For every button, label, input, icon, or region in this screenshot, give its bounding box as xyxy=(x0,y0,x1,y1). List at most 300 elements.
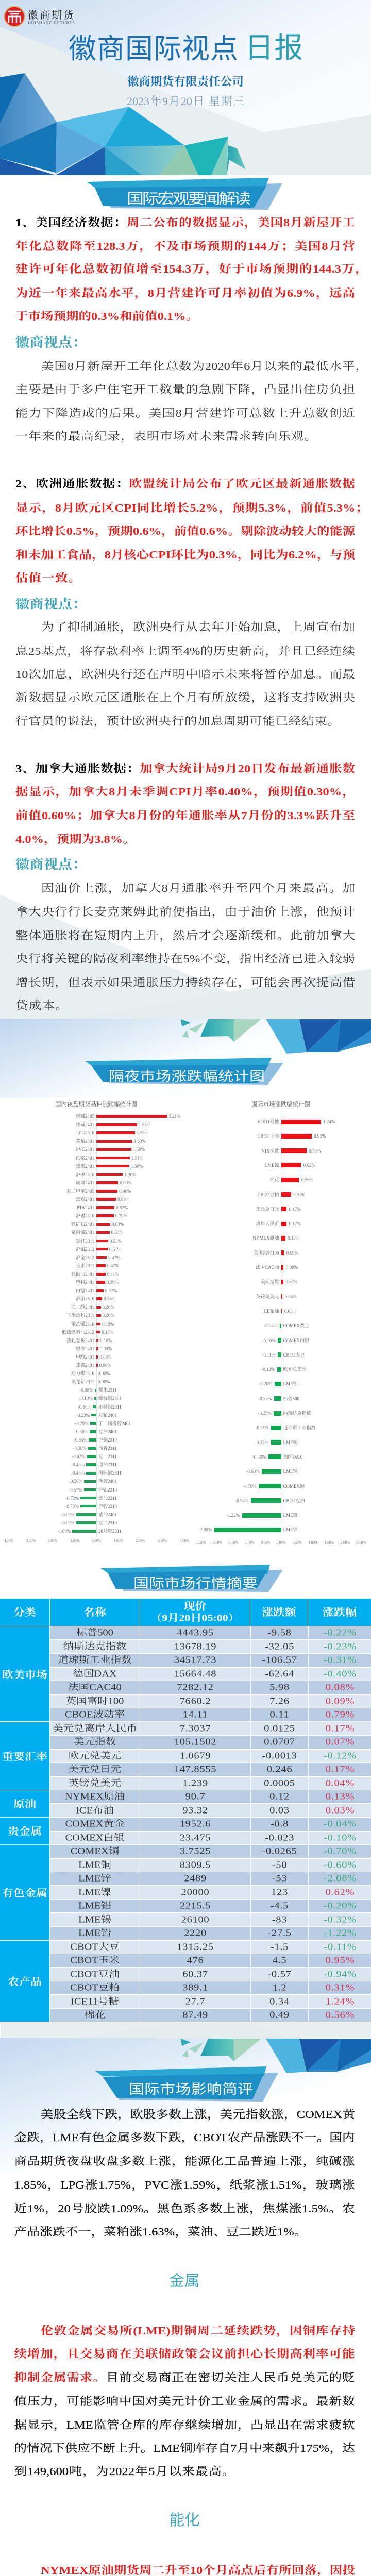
news 3: Canada inflation: 前值0.60%；加拿大8月份的年通胀率从7月份的3.3%跃升至 xyxy=(15,810,355,822)
bar chart: domestic night session: 不锈钢2311 xyxy=(98,1404,122,1410)
bar chart: international markets: 1.24% xyxy=(323,1119,335,1124)
table rows: 棉花 xyxy=(85,2010,105,2020)
table rows: ICE布油 xyxy=(76,1805,114,1815)
bar chart: domestic night session: -0.35% xyxy=(74,1437,87,1443)
bar chart: domestic night session: 0.42% xyxy=(107,1263,119,1268)
table rows: 0.13% xyxy=(326,1791,355,1802)
view 3 text: 央行将关键的隔夜利率维持在5%不变，指出经济已进入较弱 xyxy=(15,953,355,965)
table rows: 法国CAC40 xyxy=(68,1682,122,1692)
table rows: 0.08% xyxy=(326,1682,355,1692)
bar chart: domestic night session: 棕榈油2401 xyxy=(71,1272,94,1277)
bar chart: domestic night session: 焦煤2401 xyxy=(76,1164,94,1169)
bar chart: domestic night session xyxy=(3,1101,189,1543)
table header: 名称 xyxy=(83,1607,106,1618)
news 2: Europe inflation xyxy=(15,478,368,584)
bar chart: domestic night session: -1.00% xyxy=(69,1539,79,1543)
section banner: market summary xyxy=(100,1565,283,1592)
table rows: NYMEX原油 xyxy=(65,1791,125,1802)
bar chart: international markets: -2.08% xyxy=(198,1527,212,1532)
table rows: -62.64 xyxy=(265,1669,294,1679)
bar chart: international markets: -0.50% xyxy=(260,1540,271,1545)
news 3: Canada inflation: 3、加拿大通胀数据：加拿大统计局9月20日发布最新通胀数 xyxy=(15,763,355,775)
table rows: 2489 xyxy=(184,1873,207,1884)
bar chart: domestic night session: 氧化铝2311 xyxy=(71,1379,94,1384)
table rows: 0.56% xyxy=(326,2010,355,2020)
table rows: 60.37 xyxy=(182,1969,208,1979)
table rows: 0.0125 xyxy=(264,1723,295,1733)
overnight section background xyxy=(0,1019,371,1098)
heading: metals: 金属 xyxy=(169,2273,200,2290)
icon: Huishang Futures logo xyxy=(4,6,75,27)
date: 2023年9月20日 星期三 xyxy=(127,95,244,108)
table rows: 0.95% xyxy=(326,1955,355,1965)
company name: 徽商期货有限责任公司 xyxy=(127,75,244,88)
section 1 footer band xyxy=(0,895,371,1019)
bar chart: domestic night session: 0.17% xyxy=(102,1330,114,1335)
table rows: 7282.12 xyxy=(177,1682,214,1692)
heading: Huishang view 1: 徽商视点： xyxy=(15,335,87,349)
bar chart: domestic night session: 0.96% xyxy=(119,1189,131,1194)
table rows: -4.5 xyxy=(271,1901,289,1911)
bar chart: international markets: 0.07% xyxy=(285,1279,298,1284)
news 3: Canada inflation: 4.0%，预期为3.8%。 xyxy=(15,834,136,845)
table rows: -2.08% xyxy=(324,1873,357,1884)
bar chart: domestic night session: 玉米淀粉2311 xyxy=(66,1313,94,1318)
bar chart: international markets: CBOT玉米 xyxy=(257,1133,279,1139)
bar chart: international markets: -1.00% xyxy=(244,1540,255,1545)
table rows: 87.49 xyxy=(182,2010,208,2020)
bar chart: domestic night session: 甲醇2401 xyxy=(76,1354,94,1360)
heading: Huishang view 2: 徽商视点： xyxy=(15,597,87,611)
table rows: CBOE波动率 xyxy=(65,1709,125,1720)
bar chart: domestic night session: 3.21% xyxy=(168,1114,181,1119)
bar chart: international markets: 0.50% xyxy=(293,1540,302,1545)
bar chart: international markets: 1.50% xyxy=(325,1540,334,1545)
table rows: -0.32% xyxy=(324,1914,357,1924)
bar chart: international markets: -0.11% xyxy=(262,1352,275,1358)
commentary: metals: 的情况下供应不断上升。LME铜库存自7月中来飙升175%，达 xyxy=(14,2443,355,2454)
category: non-ferrous metals: 有色金属 xyxy=(2,1887,47,1899)
bar chart: international markets: 0.62% xyxy=(303,1163,315,1168)
bar chart: domestic night session: -0.46% xyxy=(71,1470,85,1476)
table rows: 0.04% xyxy=(326,1778,355,1788)
bar chart: domestic night session: 20号胶2311 xyxy=(98,1529,122,1534)
bar chart: international markets: -1.22% xyxy=(226,1513,240,1518)
bar chart: domestic night session: 3.00% xyxy=(158,1539,167,1543)
bar chart: domestic night session: 0.19% xyxy=(102,1321,114,1326)
bar chart: domestic night session: 热轧卷板2401 xyxy=(66,1338,94,1343)
bar chart: domestic night session: 1.63% xyxy=(134,1139,146,1144)
commentary: metals: 据显示，LME监管仓库的库存继续增加，凸显出在需求疲软 xyxy=(14,2419,355,2431)
chart title: 国际市场涨跌幅统计图 xyxy=(251,1101,310,1108)
bar chart: domestic night session: -4.00% xyxy=(3,1539,13,1543)
category: crude oil xyxy=(0,1790,49,1817)
bar chart: domestic night session: 纸浆2401 xyxy=(76,1155,94,1160)
table rows: 0.246 xyxy=(267,1764,292,1774)
bar chart: international markets: -2.00% xyxy=(212,1540,222,1545)
table rows: 0.34 xyxy=(269,1996,290,2006)
news 1: US economic data: 于市场预期的0.3%和前值0.1%。 xyxy=(15,311,198,323)
table rows: LME镍 xyxy=(78,1887,111,1897)
table rows: 93.32 xyxy=(182,1805,208,1815)
heading: energy and chemicals: 能化 xyxy=(169,2512,200,2529)
table rows: 德国DAX xyxy=(73,1669,117,1679)
table rows: 4.5 xyxy=(273,1955,286,1965)
bar chart: domestic night session: 0.63% xyxy=(112,1222,124,1227)
table header: （9月20日05:00） xyxy=(150,1612,240,1623)
table rows: CBOT豆粕 xyxy=(70,1982,120,1993)
section banner: overnight statistics: 隔夜市场涨跌幅统计图 xyxy=(109,1069,265,1084)
bar chart: domestic night session: -0.10% xyxy=(79,1396,93,1401)
commentary: metals: 抑制金属需求。目前交易商正在密切关注人民币兑美元的贬 xyxy=(14,2372,355,2384)
table rows: -0.31% xyxy=(324,1655,357,1665)
table rows: -0.0013 xyxy=(262,1751,297,1760)
bar chart: domestic night session: -0.56% xyxy=(69,1479,82,1484)
bar chart: international markets xyxy=(196,1101,366,1545)
table rows: -83 xyxy=(272,1914,287,1924)
table rows: 美元兑日元 xyxy=(69,1764,121,1774)
bar chart: domestic night session: -3.00% xyxy=(25,1539,36,1543)
bar chart: domestic night session: -0.08% xyxy=(79,1387,93,1393)
bar chart: domestic night session: 0.00% xyxy=(98,1379,110,1384)
bar chart: domestic night session: 0.10% xyxy=(100,1338,112,1343)
bar chart: international markets: 0.79% xyxy=(309,1148,321,1154)
bar chart: international markets: -0.40% xyxy=(252,1454,266,1460)
bar chart: international markets: -1.50% xyxy=(228,1540,238,1545)
title: 徽商国际视点 xyxy=(69,33,239,64)
commentary: market overview xyxy=(14,2108,355,2238)
table rows: -0.20% xyxy=(324,1901,357,1911)
bar chart: international markets: -0.31% xyxy=(255,1425,269,1430)
table rows: 美元指数 xyxy=(74,1737,116,1747)
category: non-ferrous metals xyxy=(0,1845,49,1940)
title xyxy=(69,31,303,64)
bar chart: international markets: 0.04% xyxy=(284,1294,297,1299)
table rows: -0.0265 xyxy=(262,1846,297,1856)
commentary: market overview: 美股全线下跌，欧股多数上涨，美元指数涨，COMEX黄 xyxy=(41,2109,355,2121)
icon: Huishang Futures logo: 徽商期货 xyxy=(28,9,75,21)
news 2: Europe inflation: 显示，8月欧元区CPI同比增长5.2%，预期5.3%，前值5.3%； xyxy=(15,502,368,514)
bar chart: international markets: 0.03% xyxy=(284,1309,296,1314)
bar chart: domestic night session: 螺纹钢2401 xyxy=(98,1396,122,1401)
view 2 text: 息25基点，将存款利率上调至4%的历史新高，并且已经连续 xyxy=(15,646,355,657)
table rows: LME铅 xyxy=(78,1928,111,1938)
table rows: 4443.95 xyxy=(177,1628,214,1638)
table rows: 纳斯达克指数 xyxy=(63,1641,127,1651)
bar chart: international markets: -0.20% xyxy=(259,1381,273,1386)
bar chart: domestic night session: -0.92% xyxy=(61,1512,75,1517)
bar chart: international markets: 法国CAC40 xyxy=(256,1265,279,1270)
table rows: 0.12 xyxy=(269,1791,290,1802)
category: Europe and US markets xyxy=(0,1626,49,1721)
bar chart: domestic night session: 沪铜2310 xyxy=(98,1437,117,1443)
bar chart: domestic night session: -0.23% xyxy=(76,1413,90,1418)
news 1: US economic data xyxy=(15,216,368,323)
category: precious metals xyxy=(0,1818,49,1844)
bar chart: international markets: LME锡 xyxy=(283,1440,298,1445)
table rows: 0.09% xyxy=(326,1696,355,1706)
bar chart: domestic night session: 纯碱2401 xyxy=(76,1122,94,1127)
bar chart: domestic night session: -1.09% xyxy=(57,1529,71,1534)
table rows: CBOT玉米 xyxy=(70,1955,120,1965)
view 1 text: 一年来的最高纪录，表明市场对未来需求转向乐观。 xyxy=(15,431,317,443)
commentary: metals: 值压力，可能影响中国对美元计价工业金属的需求。最新数 xyxy=(14,2396,355,2408)
bar chart: domestic night session: 0.32% xyxy=(105,1288,117,1293)
bar chart: domestic night session: 0.00% xyxy=(92,1539,101,1543)
bar chart: international markets: 英国富时100 xyxy=(254,1250,279,1256)
bar chart: international markets: 离岸人民币 xyxy=(256,1221,279,1226)
bar chart: international markets: 美元指数 xyxy=(260,1279,279,1284)
bar chart: domestic night session: 0.06% xyxy=(99,1363,111,1368)
bar chart: domestic night session: 聚丙烯2401 xyxy=(71,1230,94,1235)
bar chart: international markets: 2.50% xyxy=(357,1540,366,1545)
bar chart: international markets: NYMEX原油 xyxy=(252,1235,279,1241)
news 1: US economic data: 年化总数降至128.3万，不及市场预期的144万；美国8月营 xyxy=(15,241,355,252)
bar chart: domestic night session: 玻璃2401 xyxy=(76,1180,94,1185)
bar chart: domestic night session: 豆粕2401 xyxy=(98,1413,117,1418)
bar chart: domestic night session: 1.20% xyxy=(124,1172,137,1177)
bar chart: domestic night session: 豆油2401 xyxy=(98,1429,117,1434)
table rows: 0.79% xyxy=(326,1709,355,1720)
bar chart: domestic night session: 玉米2311 xyxy=(76,1263,94,1268)
bar chart: domestic night session: -0.38% xyxy=(73,1446,87,1451)
bar chart: international markets: LME铜 xyxy=(283,1469,298,1474)
bar chart: domestic night session: 0.89% xyxy=(117,1197,129,1202)
table rows: -0.60% xyxy=(324,1860,357,1870)
bar chart: domestic night session: 0.09% xyxy=(100,1346,112,1351)
table rows: 0.49 xyxy=(269,2010,290,2020)
table rows: 英镑兑美元 xyxy=(69,1778,121,1788)
table rows: COMEX铜 xyxy=(71,1846,119,1856)
heading: Huishang view 3: 徽商视点： xyxy=(15,857,87,872)
bar chart: domestic night session: -0.16% xyxy=(78,1404,91,1410)
table rows: 1.2 xyxy=(273,1982,286,1993)
table rows: -0.23% xyxy=(324,1641,357,1651)
news 3: Canada inflation xyxy=(15,762,355,845)
bar chart: international markets: VIX指数 xyxy=(262,1148,279,1154)
table rows: 8309.5 xyxy=(180,1860,211,1870)
bar chart: domestic night session: 沥青2311 xyxy=(98,1446,117,1451)
table rows: -0.12% xyxy=(324,1751,357,1760)
table rows: -27.5 xyxy=(267,1928,292,1938)
table rows: -0.8 xyxy=(271,1819,289,1829)
bar chart: international markets: 道琼斯工业指数 xyxy=(283,1425,316,1430)
view 2 text: 为了抑制通胀，欧洲央行从去年开始加息，上周宣布加 xyxy=(41,621,355,633)
bar chart: international markets: 0.13% xyxy=(288,1235,299,1241)
bar chart: international markets: LME锌 xyxy=(283,1527,298,1532)
section banner: market summary: 国际市场行情摘要 xyxy=(133,1575,258,1591)
commentary: market overview: 近1%，20号胶跌1.09%。黑色系多数上涨，焦煤涨1.5%。农 xyxy=(14,2203,355,2215)
bar chart: domestic night session: -0.73% xyxy=(65,1504,79,1509)
commentary: metals: 到149,600吨，为2022年5月以来最高。 xyxy=(14,2466,235,2478)
category: precious metals: 贵金属 xyxy=(8,1826,42,1837)
table rows: -0.11% xyxy=(324,1942,357,1952)
news 3: Canada inflation: 据显示，加拿大8月未季调CPI月率0.40%，预期值0.30%， xyxy=(15,786,355,798)
bar chart: international markets: -0.32% xyxy=(255,1440,268,1445)
bar chart: international markets: -0.04% xyxy=(264,1323,278,1328)
bar chart: domestic night session: 0.08% xyxy=(99,1354,112,1360)
bar chart: domestic night session: 0.82% xyxy=(116,1205,128,1210)
news 2: Europe inflation: 估值一致。 xyxy=(15,572,81,584)
view 3 text: 增长期，但表示如果通胀压力持续存在，可能会再次提高借 xyxy=(15,977,355,989)
section banner: macro news: 国际宏观要闻解读 xyxy=(127,191,251,207)
table rows: -1.5 xyxy=(271,1942,289,1952)
table rows: LME锡 xyxy=(78,1914,111,1924)
view 3 text: 拿大央行行长麦克莱姆此前便指出，由于油价上涨，他预计 xyxy=(15,906,355,918)
bar chart: international markets: -2.50% xyxy=(196,1540,206,1545)
bar chart: international markets: LME镍 xyxy=(265,1163,279,1168)
view 1 text: 主要是由于多户住宅开工数量的急剧下降，凸显出住房负担 xyxy=(15,384,355,396)
bar chart: domestic night session: 0.79% xyxy=(115,1213,127,1218)
bar chart: international markets: -0.12% xyxy=(261,1367,275,1372)
bar chart: international markets: -0.60% xyxy=(246,1469,260,1474)
bar chart: domestic night session: 0.47% xyxy=(108,1255,120,1260)
bar chart: domestic night session: LPG2310 xyxy=(76,1130,94,1136)
bar chart: international markets: COMEX黄金 xyxy=(283,1323,309,1328)
category: crude oil: 原油 xyxy=(13,1799,36,1809)
bar chart: international markets: 0.17% xyxy=(289,1221,301,1226)
table rows: -50 xyxy=(272,1860,287,1870)
bar chart: domestic night session: 燃油2311 xyxy=(98,1496,117,1501)
bar chart: domestic night session: 苯乙烯2310 xyxy=(71,1321,94,1326)
bar chart: domestic night session: 国际铜2311 xyxy=(98,1470,122,1476)
commentary: metals: 伦敦金属交易所(LME)期铜周二延续跌势，因铜库存持 xyxy=(41,2325,355,2337)
category: agricultural products: 农产品 xyxy=(8,1976,42,1987)
bar chart: domestic night session: 焦炭2401 xyxy=(76,1197,94,1202)
table rows: ICE11号糖 xyxy=(71,1996,119,2006)
bar chart: international markets: ICE布油 xyxy=(262,1309,279,1314)
table rows: -106.57 xyxy=(262,1655,297,1665)
bar chart: domestic night session: 0.41% xyxy=(107,1272,119,1277)
bar chart: international markets: 0.56% xyxy=(301,1177,313,1182)
bar chart: domestic night session: 4.00% xyxy=(180,1539,189,1543)
bar chart: domestic night session: 豆一2311 xyxy=(98,1454,117,1459)
bar chart: international markets: ICE11号糖 xyxy=(258,1119,279,1124)
table rows: 5.98 xyxy=(269,1682,290,1692)
table rows xyxy=(50,1626,371,2022)
section banner: market commentary: 国际市场影响简评 xyxy=(129,2081,253,2097)
bar chart: domestic night session: 0.20% xyxy=(103,1313,114,1318)
category: Europe and US markets: 欧美市场 xyxy=(2,1669,47,1680)
table rows: 123 xyxy=(271,1887,288,1897)
bar chart: domestic night session: 0.53% xyxy=(110,1239,122,1244)
bar chart: international markets: 棉花 xyxy=(269,1177,279,1182)
bar chart: domestic night session: 1.85% xyxy=(139,1122,150,1127)
bar chart: domestic night session: 1.50% xyxy=(131,1164,143,1169)
bar chart: domestic night session: PTA2401 xyxy=(77,1205,94,1210)
bar chart: domestic night session: 铁矿石2401 xyxy=(71,1222,94,1227)
table rows: 0.17% xyxy=(326,1764,355,1774)
table header: 涨跌额 xyxy=(262,1607,296,1618)
bar chart: domestic night session: 原油2311 xyxy=(98,1462,117,1467)
bar chart: domestic night session: -0.92% xyxy=(61,1520,75,1526)
table rows: 7660.2 xyxy=(180,1696,211,1706)
table rows: 20000 xyxy=(181,1887,209,1897)
commentary: market overview: 1.85%，LPG涨1.75%，PVC涨1.59%，纸浆涨1.51%，玻璃涨 xyxy=(14,2179,355,2191)
commentary: market overview: 产品涨跌不一，菜粕涨1.63%，菜油、豆二跌近1%。 xyxy=(14,2226,307,2238)
bar chart: domestic night session: 1.00% xyxy=(114,1539,123,1543)
table rows: -53 xyxy=(272,1873,287,1884)
bar chart: domestic night session: -0.57% xyxy=(69,1487,82,1492)
bar chart: international markets: CBOT豆油 xyxy=(283,1498,305,1503)
table rows: LME铜 xyxy=(78,1860,111,1870)
category: key exchange rates xyxy=(0,1722,49,1790)
table: international market summary xyxy=(0,1599,371,2022)
table rows: 90.7 xyxy=(185,1791,205,1802)
bar chart: domestic night session: 短纤2311 xyxy=(76,1239,94,1244)
bar chart: international markets: 美元兑日元 xyxy=(256,1207,279,1212)
table rows: 389.1 xyxy=(182,1982,208,1993)
bar chart: domestic night session: 粳米2311 xyxy=(98,1387,117,1393)
bar chart: international markets: CBOT大豆 xyxy=(283,1352,305,1358)
view 1 text: 美国8月新屋开工年化总数为2020年6月以来的最低水平， xyxy=(41,361,368,372)
news 2: Europe inflation: 和未加工食品，8月核心CPI环比为0.3%，同比为6.2%，与预 xyxy=(15,549,355,561)
section banner: market commentary xyxy=(95,2066,278,2102)
bar chart: domestic night session: 菜油2401 xyxy=(98,1512,117,1517)
bar chart: international markets: LME铅 xyxy=(283,1513,298,1518)
bar chart: domestic night session: -0.30% xyxy=(75,1429,88,1434)
view 2 text: 10次加息，欧洲央行还在声明中暗示未来将暂停加息。而最 xyxy=(15,669,355,681)
table rows: COMEX白银 xyxy=(65,1833,125,1842)
news 1: US economic data: 为近一年来最高水平，8月营建许可月率初值为6.9%，远高 xyxy=(15,287,355,299)
bar chart: international markets: 0.09% xyxy=(286,1250,298,1256)
table rows: LME铝 xyxy=(78,1901,111,1911)
header origami artwork xyxy=(0,73,246,175)
bar chart: international markets: -0.23% xyxy=(258,1411,272,1416)
view 3 text: 贷成本。 xyxy=(15,1000,68,1012)
table rows: 2220 xyxy=(184,1928,207,1938)
table rows: 美元兑离岸人民币 xyxy=(53,1723,137,1733)
table rows: 0.03 xyxy=(269,1805,290,1815)
bar chart: domestic night session: 沪锡2310 xyxy=(76,1213,94,1218)
bar chart: international markets: -0.10% xyxy=(262,1337,276,1343)
table rows: 7.3037 xyxy=(180,1723,211,1733)
bar chart: domestic night session: -0.29% xyxy=(75,1421,89,1426)
table rows: 0.31% xyxy=(326,1982,355,1993)
table rows: -32.05 xyxy=(265,1641,294,1651)
bar chart: international markets: 0.17% xyxy=(289,1207,301,1212)
bar chart: domestic night session: 1.59% xyxy=(133,1147,145,1152)
table rows: 476 xyxy=(187,1955,204,1965)
table rows: CBOT豆油 xyxy=(70,1969,120,1979)
table rows: 3.7525 xyxy=(180,1846,211,1856)
view 3 text: 整体通胀将在短期内上升，然后才会逐渐缓和。此前加拿大 xyxy=(15,930,355,942)
table rows: 0.11 xyxy=(270,1709,289,1720)
table rows: -0.40% xyxy=(324,1669,357,1679)
table header: 分类 xyxy=(13,1607,36,1618)
table rows: LME锌 xyxy=(78,1873,111,1884)
bar chart: international markets: 1.00% xyxy=(309,1540,318,1545)
bar chart: domestic night session: 1.51% xyxy=(131,1155,143,1160)
table rows: 标普500 xyxy=(76,1628,113,1638)
bar chart: domestic night session: -0.72% xyxy=(65,1496,79,1501)
bar chart: domestic night session: 0.99% xyxy=(120,1180,132,1185)
news 1: US economic data: 1、美国经济数据：周二公布的数据显示，美国8月新屋开工 xyxy=(15,217,355,229)
table rows: 1.24% xyxy=(326,1996,355,2006)
commentary: market overview: 商品期货夜盘收盘多数上涨，能源化工品普遍上涨，纯碱涨 xyxy=(14,2156,355,2167)
section banner: macro news xyxy=(87,178,282,210)
bar chart: domestic night session: 0.00% xyxy=(98,1371,110,1376)
view 2 text xyxy=(15,621,355,727)
table rows: 23.475 xyxy=(180,1833,211,1842)
bar chart: international markets: -0.70% xyxy=(243,1484,256,1489)
table rows: 0.03% xyxy=(326,1805,355,1815)
bar chart: international markets: 德国DAX xyxy=(283,1454,302,1460)
bar chart: international markets: CBOT豆粕 xyxy=(257,1192,279,1197)
bar chart: domestic night session: 0.51% xyxy=(109,1247,121,1252)
table rows: 欧元兑美元 xyxy=(69,1751,121,1760)
table rows: 147.8555 xyxy=(174,1764,216,1774)
